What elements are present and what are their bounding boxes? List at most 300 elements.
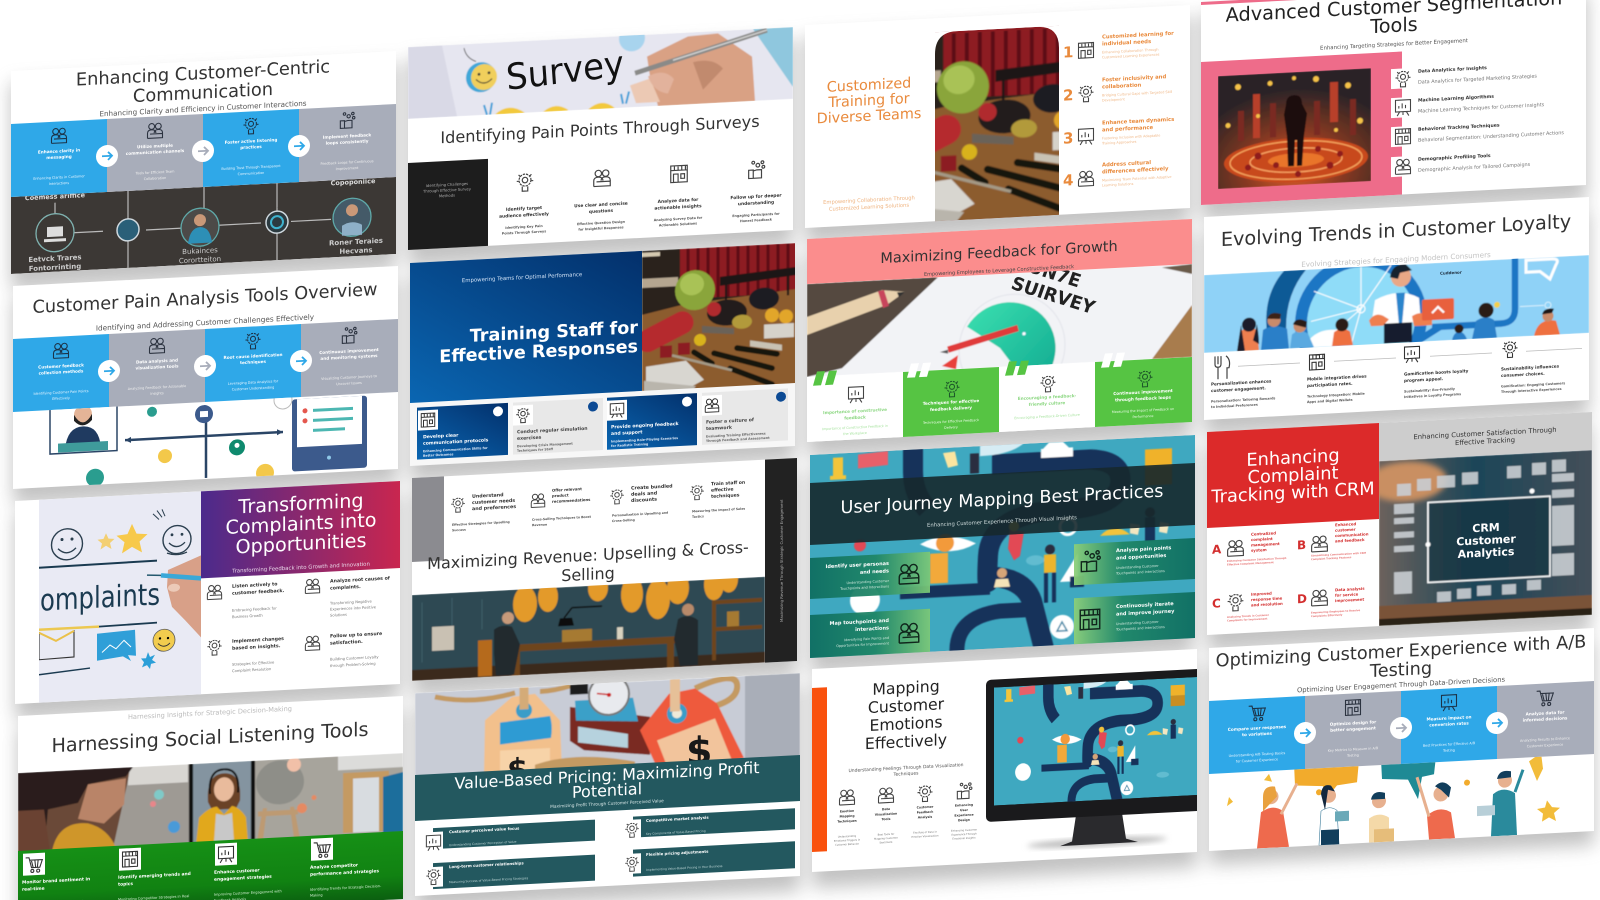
title: Harnessing Social Listening Tools (51, 718, 369, 757)
monitor (986, 669, 1197, 851)
emotion techniques: Mapping (839, 814, 855, 819)
header band: Empowering Employees to Leverage Constructive Feedback (924, 264, 1074, 278)
red title panel: Enhancing (1246, 445, 1340, 471)
survey steps: Follow up for deeper (730, 194, 782, 201)
complaint items: D (1297, 592, 1307, 606)
tools photo (642, 243, 795, 391)
feedback cards: Performance (1133, 414, 1153, 419)
purple header (201, 481, 400, 578)
process band: Identifying Customer Pain Points (34, 389, 88, 396)
pricing cards: Flexible pricing adjustments (646, 849, 709, 857)
slide background (1204, 197, 1589, 420)
green cards (18, 831, 403, 900)
meeting photo (412, 576, 765, 681)
title: Maximizing Revenue: Upselling & Cross- (427, 537, 749, 573)
pricing cards: Customer perceived value focus (449, 826, 520, 834)
complaint items: customer (1335, 527, 1356, 533)
title: Tools (1369, 13, 1418, 38)
emotion techniques: Customer Behavior (835, 842, 860, 847)
tool list: Machine Learning Algorithms (1418, 94, 1494, 104)
process band: Customer feedback (38, 362, 84, 370)
cards: Evaluating Training Effectiveness (706, 432, 766, 439)
survey steps (499, 160, 782, 236)
process band: Understanding A/B Testing Basics (1229, 751, 1285, 758)
cards: Conduct regular simulation (517, 427, 588, 435)
slide: Transforming Complaints into Opportunities (15, 481, 400, 704)
action grid: Business Growth (232, 614, 263, 619)
subtitle: Harnessing Insights for Strategic Decision-Making (128, 705, 292, 721)
process band: Foster active listening (225, 137, 277, 145)
diagram photo: Copoponiice (331, 177, 376, 187)
emotion techniques: Enhancing Customer (951, 828, 977, 833)
slide: Customized Training for Diverse Teams (805, 5, 1190, 288)
slide: Advanced Customer Segmentation Tools (1201, 0, 1586, 205)
cards: exercises (517, 435, 542, 442)
upsell steps: and preferences (472, 504, 516, 512)
slide background (18, 696, 403, 900)
complaint items: and feedback (1335, 537, 1365, 544)
right side strip (765, 458, 797, 663)
cards: for Realistic Training (611, 442, 649, 448)
diagram photo: Bukainces (182, 246, 218, 256)
complaint items: Complaint Tracking Features (1311, 555, 1352, 561)
title: Customized (827, 75, 911, 96)
listening photo (18, 753, 403, 851)
cards: Developing Crisis Management (517, 442, 573, 448)
dark title band: Enhancing Customer Experience Through Visual Insights (927, 515, 1077, 529)
numbered list: Fostering Inclusion with Adaptable (1102, 134, 1160, 141)
slide background (807, 219, 1192, 442)
journey cards: Touchpoints and Interactions (839, 584, 889, 591)
green cards: Identifying Trends for Strategic Decision- (310, 884, 381, 892)
survey steps: audience effectively (499, 211, 549, 220)
complaint items: complaint (1251, 536, 1273, 542)
red title panel: Tracking with CRM (1210, 478, 1375, 508)
grey header: Enhancing Customer Satisfaction Through (1413, 426, 1557, 441)
numbered list: Enhancing Collaboration Through (1102, 48, 1159, 55)
feedback cards: Importance of constructive (823, 407, 887, 415)
pink panel (1201, 52, 1402, 205)
numbered list: and performance (1102, 125, 1154, 134)
numbered list: 4 (1063, 171, 1073, 190)
complaint items: system (1251, 547, 1267, 553)
complaint items: Improved (1251, 591, 1272, 597)
numbered list: Learning Solutions (1102, 182, 1134, 188)
trends row: Mobile integration drives (1307, 374, 1367, 382)
journey cards: and opportunities (1116, 553, 1166, 562)
action grid: Experiences into Positive (330, 605, 377, 612)
trends row: Through Interactive Experiences (1501, 387, 1562, 394)
numbered list: individual needs (1102, 39, 1151, 48)
loyalty illustration: Cuddenor (1440, 270, 1462, 276)
process band: practices (240, 144, 262, 150)
complaint items: Empowering Employees to Resolve (1311, 609, 1360, 615)
slide: Customer Pain Analysis Tools Overview (13, 266, 398, 495)
survey steps: Identify target (506, 206, 542, 213)
action grid: Implement changes (232, 637, 284, 645)
journey cards: Understanding Customer (1116, 564, 1159, 570)
slide: Identifying Pain Points Through Surveys (408, 17, 793, 250)
process band: Data analysis and (136, 357, 178, 365)
complaint items (1212, 521, 1369, 623)
red title panel: Complaint (1248, 463, 1338, 488)
numbered list (1063, 31, 1174, 190)
tool list: Behavioral Segmentation: Understanding Customer Actions (1418, 130, 1564, 144)
title: Optimizing Customer Experience with A/B (1216, 632, 1586, 672)
title: Effectively (865, 730, 947, 753)
emotion techniques: Experience Through (951, 831, 977, 837)
title: Mapping (872, 676, 940, 699)
process band: Optimize design for (1330, 719, 1376, 727)
emotion techniques: Best Tools for (878, 833, 894, 837)
title band: Potential (572, 779, 642, 802)
journey cards: Opportunities for Improvement (836, 641, 890, 648)
pricing cards: Measuring Success of Value-Based Pricing Strategies (449, 876, 529, 884)
CRM photo: CRM (1472, 521, 1500, 535)
upsell steps (451, 478, 745, 532)
trends row: program appeal. (1404, 376, 1444, 383)
process band: Building Trust Through Transparent (221, 164, 281, 171)
dark title band: User Journey Mapping Best Practices (841, 482, 1163, 518)
feedback photo (807, 256, 1192, 377)
survey steps: for Insightful Responses (578, 225, 624, 232)
journey cards: Touchpoints and Interactions (1115, 625, 1165, 632)
subtitle: Optimizing User Engagement Through Data-Driven Decisions (1297, 676, 1506, 694)
green cards: engagement strategies (214, 874, 272, 883)
process band: Analyzing Feedback for Actionable (128, 384, 186, 391)
emotion techniques: Feedback (917, 810, 934, 815)
title: Training for (827, 91, 910, 111)
grey accent (412, 476, 444, 562)
green cards: topics (118, 881, 133, 888)
survey photo: Survey (505, 44, 625, 99)
process band: Enhancing Clarity in Customer (33, 174, 85, 181)
survey steps: Analyzing Survey Data for (654, 216, 702, 222)
emotion techniques: Techniques (837, 819, 857, 824)
trends row (1211, 337, 1582, 409)
complaint items: and resolution (1251, 601, 1283, 608)
emotion techniques: Experience (954, 813, 974, 818)
slide background (1209, 628, 1594, 851)
survey steps: questions (589, 208, 613, 215)
feedback photo: SUIRVEY (1008, 273, 1098, 319)
green cards: Monitor brand sentiment in (22, 877, 90, 886)
process band: Compare user responses (1228, 724, 1286, 732)
subtitle: Enhancing Clarity and Efficiency in Customer Interactions (99, 99, 307, 118)
emotion techniques: Customer (917, 805, 933, 810)
survey steps: Honest Feedback (740, 218, 773, 223)
slide: Harnessing Social Listening Tools (18, 696, 403, 900)
arrow buttons (1294, 711, 1508, 745)
slide: Enhancing Customer-Centric Communication (11, 51, 396, 274)
journey cards: interactions (855, 625, 889, 633)
dark side panel: Identifying Challenges (426, 181, 468, 188)
diagram photo: Corortteiton (179, 255, 221, 265)
subtitle: Techniques (893, 770, 919, 778)
numbered list: Address cultural (1102, 160, 1151, 169)
title: Communication (133, 79, 273, 107)
numbered list: collaboration (1102, 83, 1142, 91)
upsell steps: deals and (631, 490, 658, 498)
green cards: performance and strategies (310, 868, 379, 878)
emotion techniques: Emotion Visualization (912, 833, 939, 839)
process band: Leveraging Data Analytics for (228, 379, 278, 386)
upsell steps: Personalization in Upselling and (612, 511, 668, 518)
CRM photo (1379, 450, 1592, 626)
dark side panel: Through Effective Survey (422, 186, 472, 194)
title: Customer Pain Analysis Tools Overview (32, 280, 378, 318)
survey steps: Identifying Key Pain (505, 224, 543, 230)
action grid: Building Customer Loyalty (330, 655, 379, 662)
process band (13, 319, 398, 412)
feedback cards: the Workplace (843, 431, 867, 436)
action grid: through Problem-Solving (330, 662, 376, 668)
cards: Foster a culture of (706, 418, 754, 426)
process band: Best Practices for Effective A/B (1423, 741, 1475, 748)
action grid: based on insights. (232, 643, 281, 652)
pink top strip (1201, 0, 1311, 5)
process band: Testing (1346, 753, 1359, 758)
tool list: Machine Learning Techniques for Customer Insights (1418, 102, 1545, 115)
emotion techniques: Data (882, 807, 890, 811)
process band: better engagement (1330, 725, 1376, 733)
upsell steps: product (552, 492, 569, 498)
feedback cards: Encouraging a Feedback-Driven Culture (1014, 413, 1080, 420)
feedback cards: Importance of Constructive Feedback in (822, 424, 888, 431)
upsell steps: effective (711, 486, 734, 494)
cards: Enhancing Communication Skills for (423, 446, 488, 453)
action grid: customer feedback. (232, 588, 285, 597)
purple header: Transforming Feedback into Growth and Innovation (231, 562, 370, 575)
diagram photo: Coemess ariffice (25, 191, 86, 202)
survey photo (408, 27, 793, 119)
process band: Testing (1442, 748, 1455, 753)
journey cards (810, 538, 1195, 658)
process band: collection methods (39, 368, 84, 376)
slide background (812, 649, 1197, 872)
orange bar (812, 687, 827, 852)
header band (807, 219, 1192, 284)
cards: communication protocols (423, 437, 489, 447)
numbered list: Customized learning for (1102, 31, 1174, 41)
process band: Visualizing Customer Journeys to (321, 374, 377, 381)
emotion techniques: User (960, 808, 968, 812)
green cards: Improving Customer Engagement with (214, 889, 282, 897)
upsell steps: Understand (472, 493, 504, 500)
subtitle: Understanding Feelings Through Data Visualization (848, 763, 964, 774)
slide: User Journey Mapping Best Practices (810, 427, 1195, 661)
emotion techniques: Analysis (918, 815, 932, 820)
journey map (810, 427, 1195, 661)
feedback cards (807, 349, 1192, 442)
loyalty illustration (1204, 255, 1589, 353)
process band (1209, 681, 1594, 774)
title band: Value-Based Pricing: Maximizing Profit (454, 758, 760, 793)
blue header panel (410, 251, 642, 403)
journey cards: and needs (860, 568, 889, 576)
journey cards: Analyze pain points (1116, 545, 1171, 554)
cards: Techniques for Staff (517, 447, 553, 453)
trends row: consumer choices. (1501, 371, 1545, 378)
feedback cards: Techniques for effective (923, 398, 979, 406)
trends row: customer engagement. (1211, 385, 1266, 393)
tool list: Data Analytics for Insights (1418, 65, 1487, 75)
tool list: Demographic Profiling Tools (1418, 153, 1491, 163)
slide background (1201, 0, 1586, 205)
tool list: Behavioral Tracking Techniques (1418, 122, 1500, 133)
feedback cards: Delivery (944, 425, 958, 430)
emotion techniques: Emotional Insights (952, 835, 976, 841)
action grid: Solutions (330, 613, 347, 618)
complaint items: Complaints for Improvement (1227, 616, 1268, 623)
process band: Improvement (336, 166, 359, 171)
survey steps: Engaging Participants for (732, 212, 780, 218)
complaint items: Data analysis (1335, 586, 1365, 592)
process band: Uncover Issues (336, 381, 362, 386)
feedback cards: through feedback loops (1115, 395, 1172, 402)
cards: Provide ongoing feedback (611, 422, 679, 431)
red title panel (1207, 423, 1379, 528)
subtitle: Empowering Collaboration Through (823, 195, 915, 206)
slide: Maximizing Revenue: Upselling & Cross-Selling (412, 458, 797, 681)
CRM photo: Customer (1456, 532, 1516, 549)
action grid: satisfaction. (330, 639, 363, 647)
feedback cards: Measuring the Impact of Feedback on (1112, 407, 1174, 414)
trends row: participation rates. (1307, 381, 1353, 388)
complaint items: Streamlining Communication with CRM (1311, 552, 1366, 558)
survey steps: actionable insights (654, 203, 702, 212)
diagram photo: Eetvck Trares (28, 253, 82, 264)
title: Identifying Pain Points Through Surveys (440, 112, 760, 147)
process band: Continuous improvement (319, 347, 379, 355)
cards: Develop clear (423, 433, 458, 440)
feedback cards: Encouraging a feedback- (1018, 393, 1076, 401)
process band: Analyzing Results to Enhance (1520, 736, 1570, 743)
arrow buttons (96, 134, 310, 168)
upsell steps: Cross-Selling Techniques to Boost (532, 515, 591, 522)
process band: Utilize multiple (137, 143, 173, 149)
action grid: Transforming Negative (330, 599, 372, 606)
slide: Value-Based Pricing: Maximizing Profit Potential (415, 665, 800, 896)
journey cards: and improve journey (1116, 609, 1175, 618)
process band: Collaboration (144, 176, 166, 181)
journey cards: Understanding Customer (846, 579, 889, 585)
feedback cards: feedback (844, 414, 866, 421)
survey steps: Points Through Surveys (502, 229, 546, 236)
numbered list: 1 (1063, 43, 1073, 62)
trends row: Gamification boosts loyalty (1404, 368, 1468, 377)
complaint items: management (1251, 541, 1280, 548)
dark side panel (408, 159, 488, 250)
subtitle: Enhancing Targeting Strategies for Better Engagement (1320, 38, 1468, 52)
emotion techniques: Visualization (875, 812, 897, 817)
survey steps: Actionable Solutions (659, 221, 697, 227)
process band: messaging (46, 154, 72, 160)
title: Selling (561, 563, 615, 585)
slide background (805, 5, 1190, 228)
purple header: Opportunities (236, 529, 366, 559)
title: Diverse Teams (817, 106, 921, 127)
journey cards: Touchpoints and Interactions (1115, 569, 1165, 576)
journey cards: Map touchpoints and (830, 618, 889, 627)
slide: Mapping Customer Emotions Effectively (812, 647, 1226, 872)
process band: Feedback Loops for Continuous (320, 159, 374, 166)
trends row: Apps and Digital Wallets (1307, 398, 1353, 404)
numbered list: 2 (1063, 86, 1073, 105)
dark title band (810, 463, 1195, 545)
grey header (1379, 412, 1592, 461)
complaint items: Centralized (1251, 530, 1276, 537)
pricing cards (423, 808, 795, 890)
tool list: Data Analytics for Targeted Marketing Strategies (1418, 74, 1537, 86)
process band: Effectively (52, 396, 70, 401)
complaint items: Complaints Effectively (1311, 613, 1343, 618)
team illustration (1227, 756, 1560, 848)
upsell steps: Offer relevant (552, 486, 582, 493)
tool list: Demographic Analysis for Tailored Campaigns (1418, 162, 1531, 174)
numbered list: Development (1102, 97, 1125, 103)
upsell steps: recommendations (552, 497, 591, 504)
process band: Key Metrics to Measure in A/B (1328, 746, 1378, 753)
pricing cards: Understanding Customer Perception of Value (449, 840, 517, 847)
title: Enhancing Customer-Centric (76, 56, 330, 91)
cards: and support (611, 429, 643, 437)
complaint items: B (1297, 538, 1306, 552)
process band: to variations (1242, 731, 1272, 737)
diagram photo (11, 177, 396, 274)
complaint items: communication (1335, 531, 1369, 538)
emotion techniques: Design (958, 818, 970, 822)
complaint items: A (1212, 542, 1222, 557)
cards: Implementing Role-Playing Scenarios (611, 436, 678, 444)
numbered list: 3 (1063, 129, 1073, 148)
upsell steps: discounts (631, 497, 657, 504)
complaint items: C (1212, 596, 1221, 611)
trends row: Technology Integration: Mobile (1307, 392, 1365, 399)
process band: Communication (238, 171, 264, 176)
emotion techniques: Enhancing (955, 803, 973, 808)
green cards: Enhance customer (214, 868, 260, 876)
journey cards: Identifying Pain Points and (844, 636, 889, 642)
slide background (11, 51, 396, 274)
slide: Training Staff for Effective Responses (410, 243, 797, 466)
process band: Insights (150, 391, 164, 396)
trends row: Sustainability: Eco-Friendly (1404, 387, 1455, 394)
complaints photo (39, 492, 201, 702)
slide: Enhancing Complaint Tracking with CRM (1207, 412, 1592, 635)
crowd photo (1218, 68, 1371, 190)
title: Customer (868, 694, 945, 717)
trends row: Initiatives in Loyalty Programs (1404, 392, 1461, 399)
process band: Tools for Efficient Team (136, 170, 174, 176)
action grid: Listen actively to (232, 582, 278, 590)
process band: Interactions (49, 181, 69, 186)
process band: Root cause identification (224, 352, 282, 360)
process band: Customer Understanding (232, 385, 274, 392)
numbered list: Training Approaches (1101, 140, 1137, 146)
upsell steps: customer needs (472, 498, 515, 506)
feedback cards: Continuous improvement (1113, 388, 1173, 396)
emotion techniques: Tools (882, 817, 891, 821)
numbered list: Enhance team dynamics (1102, 117, 1174, 127)
upsell steps: techniques (711, 492, 740, 500)
emotion techniques: The Role of Data in (913, 831, 937, 835)
complaint items: response time (1251, 595, 1283, 602)
right side strip: Maximizing Revenue Through Strategic Customer Engagement (779, 499, 784, 622)
numbered list: Customized Learning Experiences (1102, 53, 1160, 60)
subtitle: Customized Learning Solutions (829, 203, 909, 213)
price tag photo: $ (507, 752, 528, 788)
